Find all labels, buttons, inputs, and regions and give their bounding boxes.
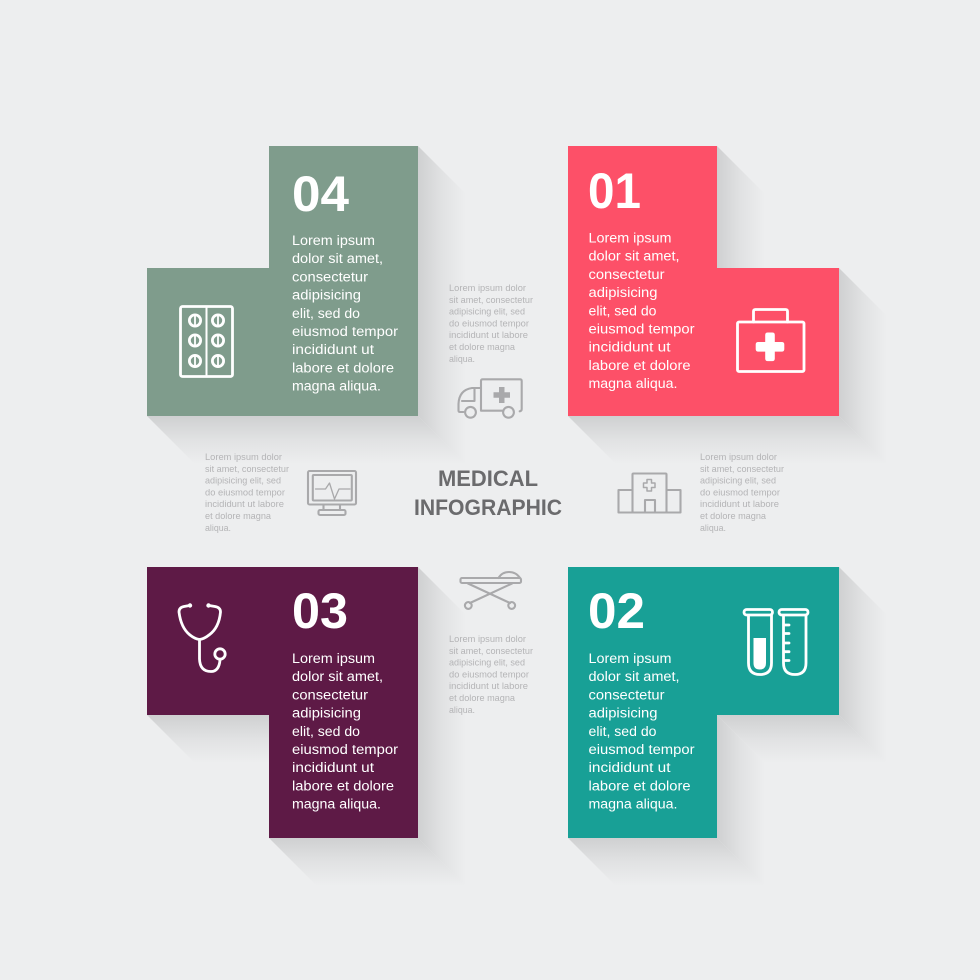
text block 01: labore et dolore <box>588 358 691 374</box>
text block 02: consectetur <box>588 687 665 703</box>
text block: left: incididunt ut labore <box>205 499 284 510</box>
icon: stethoscope <box>179 603 225 672</box>
text block 03: adipisicing <box>292 706 361 722</box>
text block: bottom <box>449 634 533 716</box>
text block: bottom: Lorem ipsum dolor <box>449 634 526 645</box>
icon: heart rate monitor <box>308 471 356 515</box>
text block 04: incididunt ut <box>292 342 374 358</box>
text block: right: adipisicing elit, sed <box>700 476 776 487</box>
number 03: 03 <box>292 583 348 639</box>
number 01: 01 <box>588 163 641 219</box>
text block 03 <box>292 651 398 813</box>
text block 04: magna aliqua. <box>292 379 381 395</box>
text block 01: magna aliqua. <box>588 376 678 392</box>
text block: left: sit amet, consectetur <box>205 464 289 475</box>
text block: top: adipisicing elit, sed <box>449 307 525 318</box>
text block 03: elit, sed do <box>292 724 360 740</box>
text block: top: do eiusmod tempor <box>449 318 529 329</box>
text block 03: consectetur <box>292 687 368 703</box>
panel: 03 <box>147 567 418 838</box>
text block: right: et dolore magna <box>700 511 767 522</box>
text block: left: adipisicing elit, sed <box>205 476 281 487</box>
text block 04: dolor sit amet, <box>292 251 383 267</box>
text block 02: labore et dolore <box>588 778 691 794</box>
text block: right <box>700 452 784 534</box>
text block 02: dolor sit amet, <box>588 669 680 685</box>
panel shadows <box>147 146 887 886</box>
panel: 04 <box>147 146 418 416</box>
text block 03: Lorem ipsum <box>292 651 375 667</box>
text block: left: Lorem ipsum dolor <box>205 452 282 463</box>
text block 04: Lorem ipsum <box>292 233 375 249</box>
text block 01: incididunt ut <box>588 340 671 356</box>
icon: hospital <box>618 474 680 512</box>
title <box>414 466 562 520</box>
text block 01: adipisicing <box>588 285 658 301</box>
text block: right: aliqua. <box>700 523 726 534</box>
text block: left: et dolore magna <box>205 511 272 522</box>
title: MEDICAL <box>438 466 538 491</box>
text block: top: incididunt ut labore <box>449 330 528 341</box>
text block 01: elit, sed do <box>588 303 657 319</box>
text block 01 <box>588 230 695 392</box>
text block: left: aliqua. <box>205 523 231 534</box>
panel: 01 <box>568 146 839 416</box>
icon: test tubes <box>744 610 808 674</box>
text block: top: sit amet, consectetur <box>449 295 533 306</box>
text block: right: incididunt ut labore <box>700 499 779 510</box>
icon: first aid kit <box>738 310 804 372</box>
text block: bottom: et dolore magna <box>449 693 516 704</box>
text block: bottom: do eiusmod tempor <box>449 669 529 680</box>
text block: bottom: aliqua. <box>449 705 475 716</box>
text block 01: eiusmod tempor <box>588 322 695 338</box>
text block: right: Lorem ipsum dolor <box>700 452 777 463</box>
text block 02: elit, sed do <box>588 724 657 740</box>
text block 02: Lorem ipsum <box>588 651 672 667</box>
text block 02: adipisicing <box>588 706 658 722</box>
text block: right: do eiusmod tempor <box>700 487 780 498</box>
text block 02: eiusmod tempor <box>588 742 695 758</box>
text block: right: sit amet, consectetur <box>700 464 784 475</box>
text block 04: adipisicing <box>292 288 361 304</box>
text block 03: labore et dolore <box>292 778 394 794</box>
text block 04: labore et dolore <box>292 360 394 376</box>
panel: 02 <box>568 567 839 838</box>
text block 03: eiusmod tempor <box>292 742 398 758</box>
text block 02 <box>588 651 695 813</box>
text block: left: do eiusmod tempor <box>205 487 285 498</box>
text block: top: Lorem ipsum dolor <box>449 283 526 294</box>
text block 01: consectetur <box>588 267 665 283</box>
text block 04: consectetur <box>292 269 368 285</box>
text block 04: eiusmod tempor <box>292 324 398 340</box>
text block: bottom: adipisicing elit, sed <box>449 658 525 669</box>
number 02: 02 <box>588 583 645 639</box>
text block 03: dolor sit amet, <box>292 669 383 685</box>
title: INFOGRAPHIC <box>414 495 562 520</box>
text block: bottom: incididunt ut labore <box>449 681 528 692</box>
text block 03: magna aliqua. <box>292 797 381 813</box>
text block: top <box>449 283 533 365</box>
text block 01: dolor sit amet, <box>588 249 680 265</box>
text block: top: et dolore magna <box>449 342 516 353</box>
text block 04 <box>292 233 398 395</box>
icon: ambulance <box>458 379 522 418</box>
text block 01: Lorem ipsum <box>588 230 672 246</box>
icon: pill blister pack <box>180 306 232 376</box>
text block: top: aliqua. <box>449 354 475 365</box>
number 04: 04 <box>292 166 349 222</box>
text block 03: incididunt ut <box>292 760 374 776</box>
text block: bottom: sit amet, consectetur <box>449 646 533 657</box>
text block 04: elit, sed do <box>292 306 360 322</box>
icon: stretcher <box>460 572 521 609</box>
text block 02: incididunt ut <box>588 760 671 776</box>
text block: left <box>205 452 289 534</box>
text block 02: magna aliqua. <box>588 797 678 813</box>
